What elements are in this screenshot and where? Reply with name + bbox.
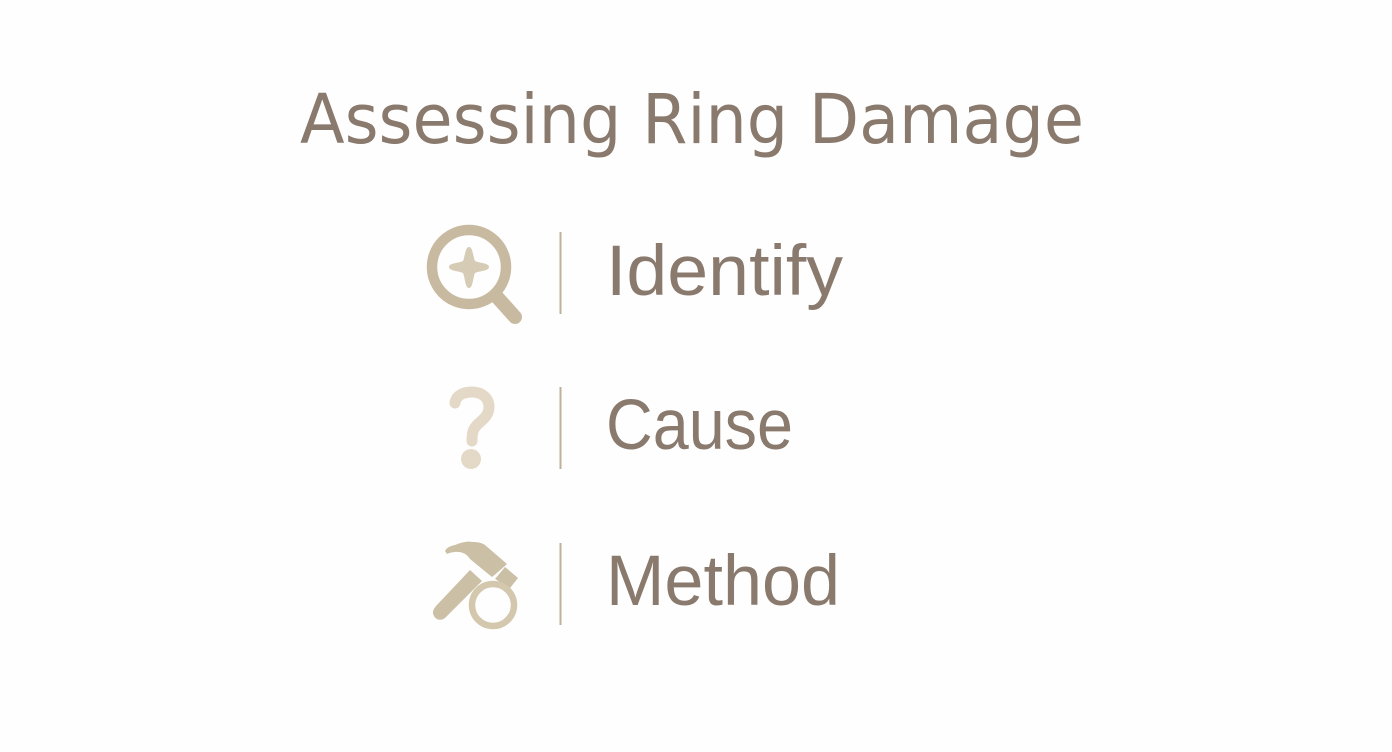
title: Assessing Ring Damage	[300, 80, 1084, 160]
icon: hammer and ring	[433, 542, 518, 626]
divider	[560, 543, 562, 625]
row: method	[433, 542, 840, 626]
divider	[560, 387, 562, 469]
label: cause: Cause	[606, 386, 793, 465]
label: method: Method	[606, 542, 840, 621]
icon: question mark	[455, 392, 489, 469]
divider	[560, 232, 562, 314]
row: identify	[432, 230, 844, 317]
row: cause	[455, 386, 793, 469]
label: identify: Identify	[606, 232, 844, 311]
icon: magnifying glass	[432, 230, 515, 317]
